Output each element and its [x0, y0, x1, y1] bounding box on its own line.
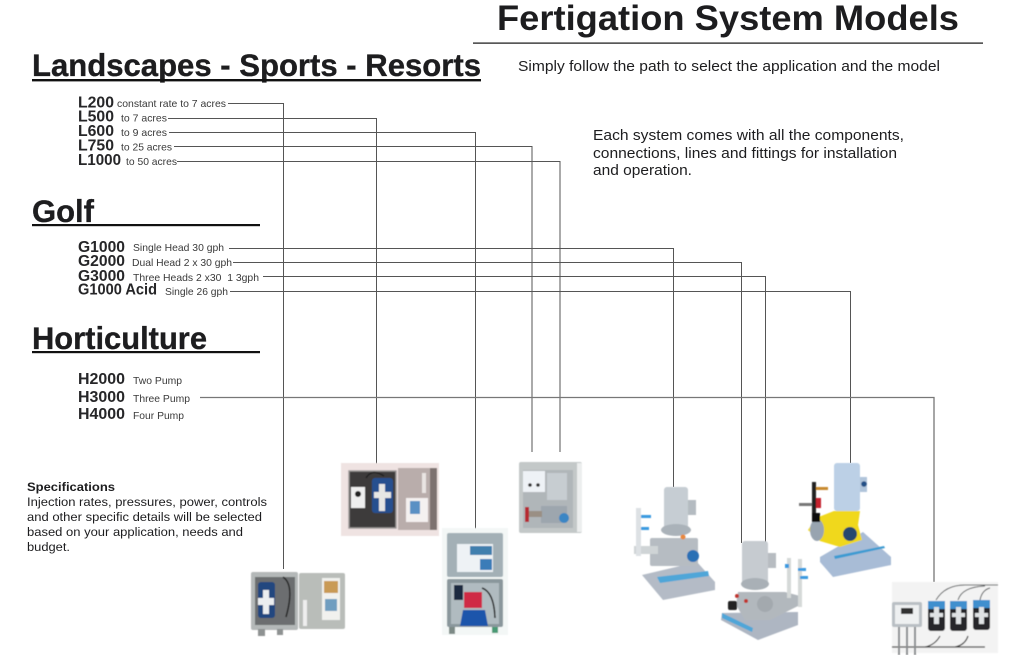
model list: landscapes: L500: [78, 108, 114, 126]
model list: horticulture: [78, 371, 190, 423]
text block: specifications: and other specific details will be selected: [27, 510, 262, 524]
text block: specifications: based on your application, needs and: [27, 525, 243, 539]
model list: landscapes: to 9 acres: [121, 128, 167, 139]
arrow path: H3000: [200, 398, 934, 582]
heading: landscapes: Landscapes - Sports - Resorts: [32, 47, 481, 83]
model list: landscapes: L200: [78, 94, 114, 112]
model list: golf: G2000: [78, 253, 125, 270]
arrow path: L1000: [177, 162, 560, 452]
text block: specifications: [27, 480, 267, 554]
model list: horticulture: H3000: [78, 389, 125, 406]
heading: golf: Golf: [32, 193, 94, 229]
text block: specifications: Specifications: [27, 480, 115, 494]
product photo: L600 enclosure: [442, 528, 508, 635]
model list: golf: Single 26 gph: [165, 287, 228, 298]
model list: golf: Three Heads 2 x30 1 3gph: [133, 273, 259, 284]
arrow path: G3000: [263, 276, 766, 543]
heading: horticulture: Horticulture: [32, 320, 207, 356]
text block: system contents: Each system comes with all the components,: [593, 128, 904, 144]
arrow path: L500: [168, 118, 376, 464]
arrow path: G2000: [233, 262, 742, 543]
model list: landscapes: L1000: [78, 152, 121, 169]
model list: landscapes: L750: [78, 138, 114, 154]
model list: golf: G1000 Acid: [78, 282, 157, 298]
arrow path: G1000 Acid: [230, 292, 850, 463]
model list: horticulture: H4000: [78, 406, 125, 423]
model list: landscapes: constant rate to 7 acres: [117, 99, 226, 110]
model list: golf: Single Head 30 gph: [133, 243, 224, 254]
model list: horticulture: Three Pump: [133, 394, 190, 405]
product photo: G1000 pump: [634, 487, 715, 600]
product photo: L500 enclosure: [341, 463, 439, 536]
model list: golf: G3000: [78, 268, 125, 285]
arrow path: L200: [228, 104, 284, 569]
text block: system contents: [593, 128, 904, 179]
model list: golf: [78, 239, 259, 298]
text block: system contents: and operation.: [593, 163, 692, 179]
product photo: L200 enclosure: [251, 572, 345, 636]
text block: system contents: connections, lines and fittings for installation: [593, 146, 897, 162]
model list: golf: G1000: [78, 239, 125, 256]
intro instruction: Simply follow the path to select the application and the model: [518, 59, 940, 75]
arrow path: L750: [174, 146, 532, 452]
model list: landscapes: to 25 acres: [121, 142, 172, 154]
connector paths: [168, 104, 934, 582]
arrow path: G1000: [229, 248, 674, 487]
model list: horticulture: H2000: [78, 371, 125, 388]
text block: specifications: budget.: [27, 540, 70, 554]
title: Fertigation System Models: [497, 0, 959, 38]
model list: landscapes: [78, 94, 226, 169]
product photo: G2000 pump: [721, 541, 808, 640]
product photo: L750 and L1000 enclosure: [519, 462, 582, 533]
text block: specifications: Injection rates, pressures, power, controls: [27, 495, 267, 509]
model list: golf: Dual Head 2 x 30 gph: [132, 258, 232, 269]
product photo: H3000 multi-pump panel: [892, 582, 998, 655]
arrow path: L600: [169, 132, 476, 535]
model list: landscapes: to 50 acres: [126, 157, 177, 168]
product photo: G1000 Acid pump: [799, 463, 891, 577]
model list: landscapes: to 7 acres: [121, 114, 167, 124]
model list: landscapes: L600: [78, 123, 114, 140]
model list: horticulture: Four Pump: [133, 411, 184, 422]
model list: horticulture: Two Pump: [133, 376, 182, 387]
